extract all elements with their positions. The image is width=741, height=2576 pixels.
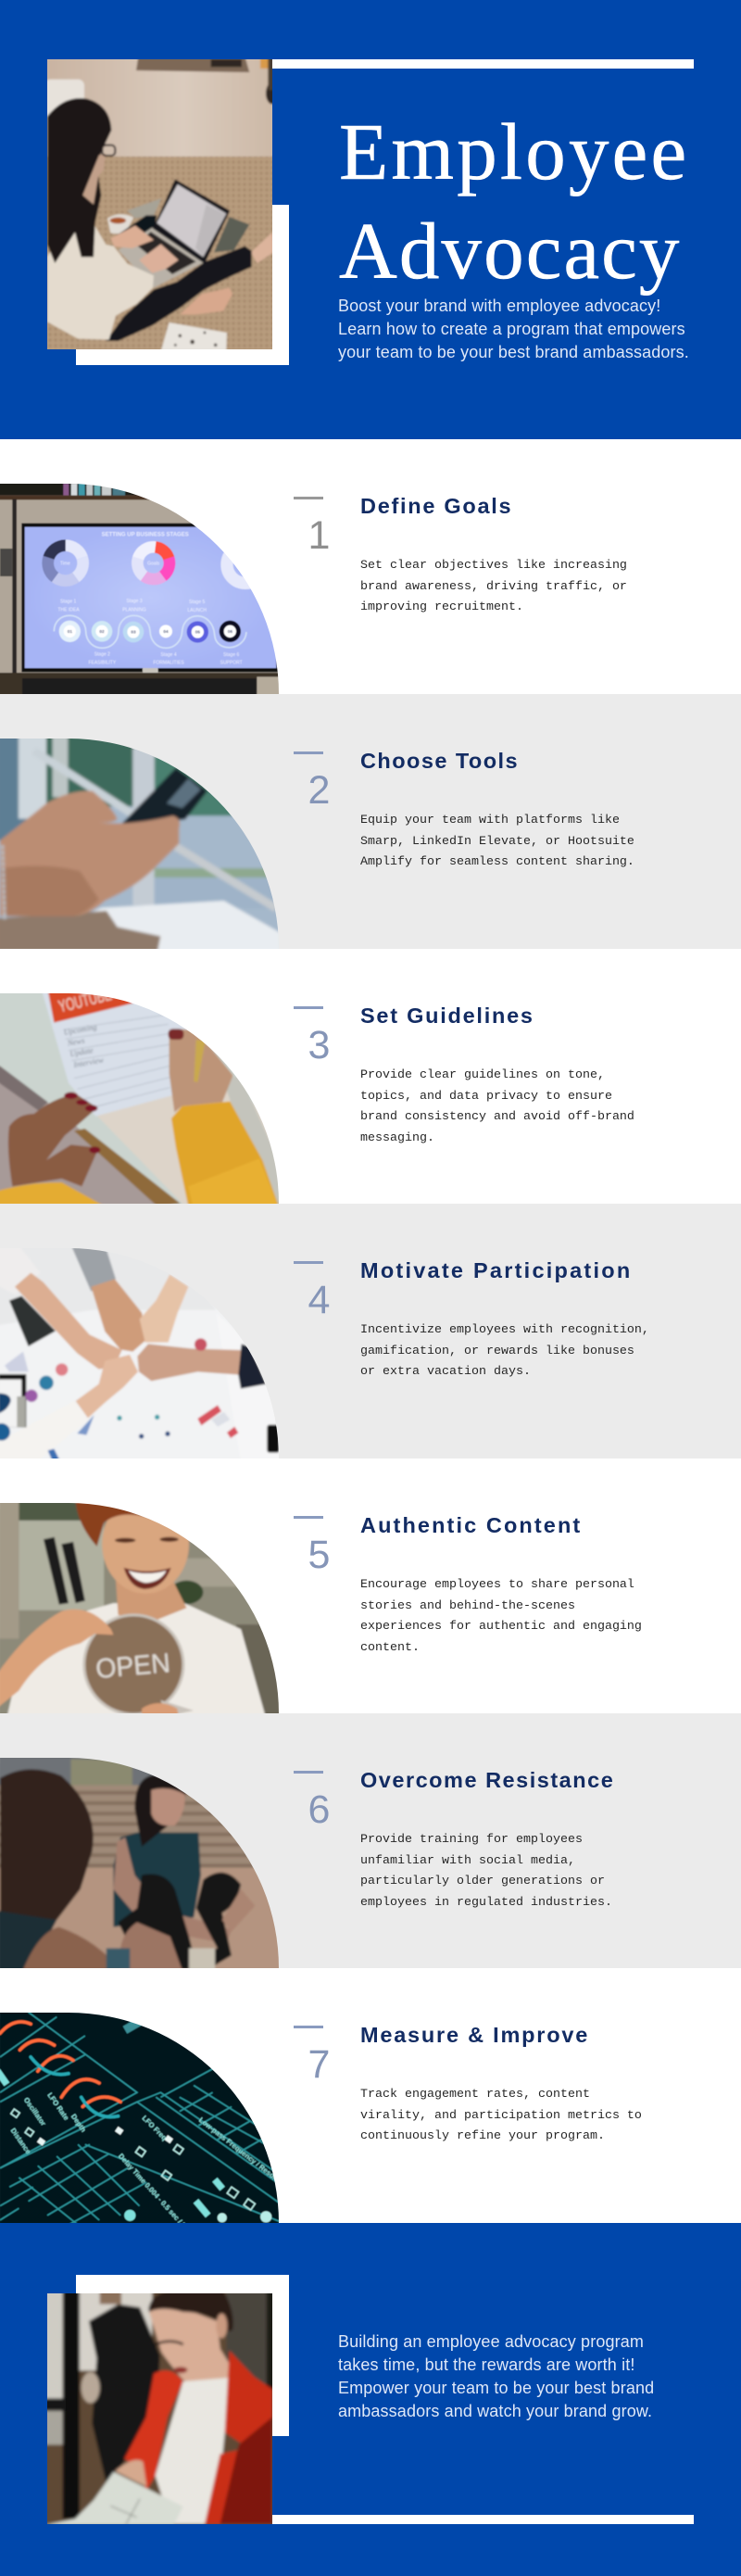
title <box>339 107 689 296</box>
description: virality, and participation metrics to <box>360 2109 642 2122</box>
photo: TV with business stages slide: THE IDEA <box>57 608 80 613</box>
closing text: Building an employee advocacy program <box>338 2332 644 2351</box>
photo: glowing dashboard screen: LFO Rate <box>45 2091 70 2122</box>
panel: step 1 define goals <box>0 484 626 694</box>
dash <box>294 1006 323 1009</box>
panel: step 3 set guidelines <box>0 993 634 1204</box>
description: unfamiliar with social media, <box>360 1853 575 1868</box>
photo: glowing dashboard screen: Depth <box>69 2113 88 2134</box>
photo: two women talking in a gym <box>0 1758 279 1968</box>
closing text: ambassadors and watch your brand grow. <box>338 2402 652 2420</box>
number 7: 7 <box>308 2042 330 2087</box>
intro text: Learn how to create a program that empowers <box>338 320 685 338</box>
photo: TV with business stages slide: SETTING UP BUSINESS STAGES <box>102 532 189 537</box>
photo: TV with business stages slide: Stage 3 <box>126 599 143 604</box>
panel: step 4 motivate participation <box>0 1204 741 1458</box>
heading: Measure & Improve <box>360 2023 589 2047</box>
photo: team hands joined over charts <box>0 1248 279 1458</box>
photo: hands on a checklist <box>0 993 279 1204</box>
heading: Motivate Participation <box>360 1258 632 1282</box>
description <box>360 1323 649 1379</box>
dash <box>294 1516 323 1519</box>
photo: TV with business stages slide: 04 <box>163 629 169 634</box>
description <box>360 814 634 869</box>
photo: TV with business stages slide: Stage 4 <box>160 652 177 658</box>
photo: hands on a checklist: Update <box>69 1045 94 1058</box>
dash <box>294 2026 323 2028</box>
description: continuously refine your program. <box>360 2129 605 2143</box>
description: Amplify for seamless content sharing. <box>360 855 634 869</box>
number 4: 4 <box>308 1278 330 1322</box>
white offset frame behind photo <box>76 2275 289 2436</box>
description <box>360 1068 634 1145</box>
photo: TV with business stages slide: Stage 5 <box>189 600 205 605</box>
white top bar <box>272 59 694 69</box>
photo: TV with business stages slide <box>0 484 279 694</box>
photo: TV with business stages slide: Goals <box>147 561 160 566</box>
white bottom bar <box>272 2515 694 2524</box>
number 3: 3 <box>308 1023 330 1067</box>
photo: glowing dashboard screen: LFO Freq <box>141 2114 169 2142</box>
number 5: 5 <box>308 1533 330 1577</box>
intro text: your team to be your best brand ambassadors. <box>338 343 689 361</box>
photo: hand holding phone <box>0 739 278 949</box>
photo: TV with business stages slide: Stage 2 <box>94 652 110 658</box>
white offset frame behind photo <box>76 205 289 365</box>
photo: TV with business stages slide: 03 <box>131 630 136 635</box>
panel: step 2 choose tools <box>0 694 741 949</box>
photo: glowing dashboard screen: Distance <box>9 2127 32 2155</box>
photo: glowing dashboard screen: Oscillator <box>22 2096 47 2128</box>
closing text: Empower your team to be your best brand <box>338 2379 654 2397</box>
photo: smiling woman holding open sign: OPEN <box>94 1648 171 1685</box>
description: messaging. <box>360 1130 434 1145</box>
dash <box>294 1771 323 1774</box>
description <box>360 2088 642 2143</box>
heading: Overcome Resistance <box>360 1768 614 1792</box>
photo: TV with business stages slide: PLANNING <box>122 607 146 612</box>
photo: TV with business stages slide: Stage 6 <box>223 652 239 658</box>
photo: hands on a checklist: News <box>66 1035 86 1048</box>
description: employees in regulated industries. <box>360 1896 612 1909</box>
description: Encourage employees to share personal <box>360 1578 634 1592</box>
panel: header <box>0 0 741 439</box>
dash <box>294 497 323 499</box>
photo: TV with business stages slide: Time <box>60 561 70 566</box>
closing text: takes time, but the rewards are worth it! <box>338 2355 634 2374</box>
photo: hands on a checklist: Upcoming <box>63 1022 98 1037</box>
description: content. <box>360 1640 420 1655</box>
description: Provide clear guidelines on tone, <box>360 1068 605 1082</box>
description <box>360 1578 642 1655</box>
photo: TV with business stages slide: 01 <box>68 629 72 634</box>
description: Provide training for employees <box>360 1833 583 1847</box>
description: Smarp, LinkedIn Elevate, or Hootsuite <box>360 834 634 849</box>
photo: woman in red blazer reading document <box>47 2293 272 2524</box>
number 2: 2 <box>308 768 330 813</box>
description: particularly older generations or <box>360 1875 605 1888</box>
description: Track engagement rates, content <box>360 2088 590 2102</box>
description <box>360 1833 612 1909</box>
photo: TV with business stages slide: LAUNCH <box>187 608 207 613</box>
photo: smiling woman holding open sign <box>0 1503 279 1713</box>
photo: TV with business stages slide: SUPPORT <box>220 661 243 666</box>
description <box>360 559 627 614</box>
dash <box>294 1261 323 1264</box>
heading: Define Goals <box>360 494 512 518</box>
heading: Set Guidelines <box>360 1004 534 1028</box>
description: experiences for authentic and engaging <box>360 1620 642 1634</box>
description: Set clear objectives like increasing <box>360 559 627 573</box>
description: Equip your team with platforms like <box>360 814 620 827</box>
intro text <box>338 297 689 361</box>
panel: step 7 measure and improve <box>0 2013 641 2223</box>
dash <box>294 751 323 754</box>
description: or extra vacation days. <box>360 1365 531 1379</box>
description: topics, and data privacy to ensure <box>360 1090 612 1103</box>
title: Advocacy <box>339 206 681 296</box>
photo: TV with business stages slide: FEASIBILITY <box>88 661 117 666</box>
photo: TV with business stages slide: FORMALITIES <box>153 661 184 666</box>
heading: Choose Tools <box>360 749 519 773</box>
description: gamification, or rewards like bonuses <box>360 1344 634 1358</box>
title: Employee <box>339 107 689 196</box>
photo: TV with business stages slide: Stage 1 <box>60 599 76 604</box>
intro text: Boost your brand with employee advocacy! <box>338 297 660 315</box>
panel: step 6 overcome resistance <box>0 1713 741 1968</box>
photo: glowing dashboard screen <box>0 2013 279 2223</box>
number 1: 1 <box>308 513 330 558</box>
heading: Authentic Content <box>360 1513 582 1537</box>
photo: woman typing on laptop <box>47 59 272 349</box>
photo: TV with business stages slide: 06 <box>228 629 232 634</box>
photo: hands on a checklist: Interview <box>72 1054 105 1069</box>
description: stories and behind-the-scenes <box>360 1599 575 1612</box>
description: improving recruitment. <box>360 600 523 614</box>
photo: TV with business stages slide: 02 <box>99 629 105 634</box>
number 6: 6 <box>308 1787 330 1832</box>
panel: footer <box>0 2223 741 2576</box>
description: Incentivize employees with recognition, <box>360 1323 649 1337</box>
photo: TV with business stages slide: 05 <box>195 630 200 635</box>
description: brand awareness, driving traffic, or <box>360 580 627 593</box>
closing text <box>338 2332 654 2420</box>
panel: step 5 authentic content <box>0 1503 641 1713</box>
description: brand consistency and avoid off-brand <box>360 1110 634 1124</box>
